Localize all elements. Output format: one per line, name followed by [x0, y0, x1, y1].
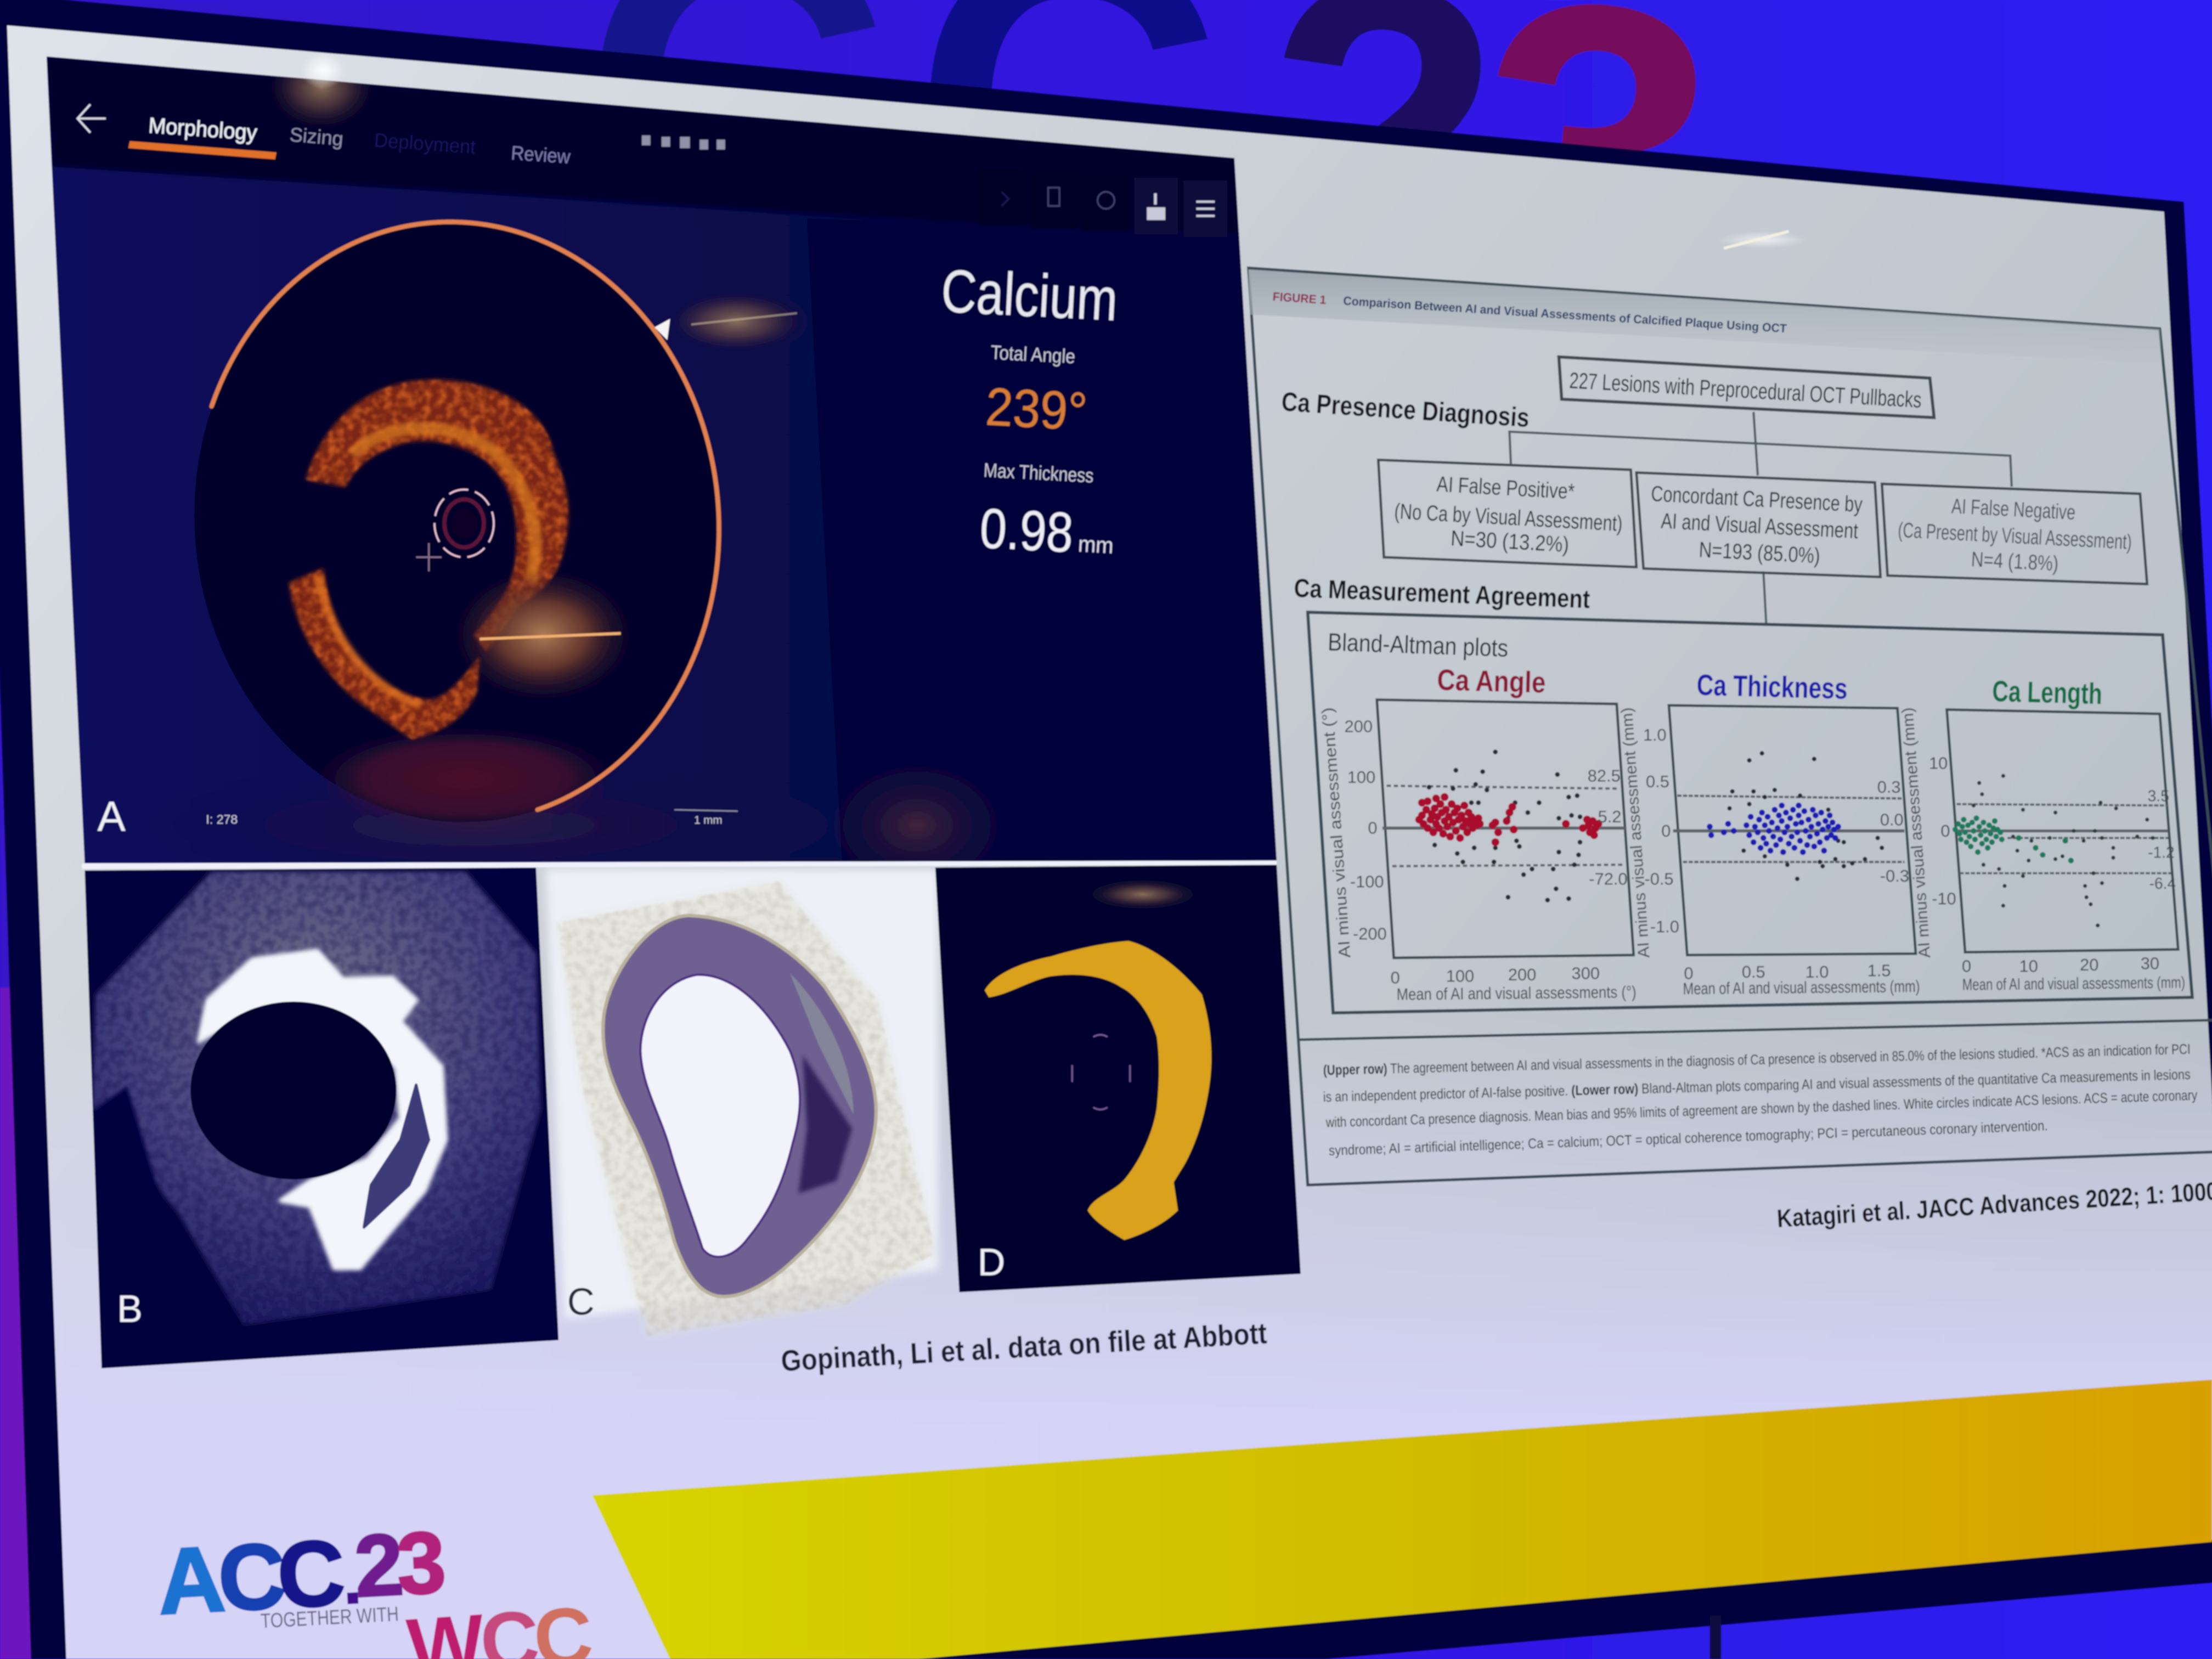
- flow box: AI false positive: [1378, 460, 1637, 567]
- axis tick labels: -1.0: [1650, 917, 1679, 936]
- vessel wall: [603, 916, 876, 1296]
- label: Total Angle: Total Angle: [990, 341, 1076, 368]
- flow box: AI false negative: N=4 (1.8%): [1971, 548, 2059, 575]
- flow box: concordant: AI and Visual Assessment: [1660, 509, 1859, 543]
- axis tick labels: [1929, 753, 2159, 976]
- limits labels: 3.5: [2148, 787, 2169, 805]
- lumen: [190, 1002, 397, 1180]
- catheter marks: [1072, 1035, 1130, 1109]
- data points: all lesions: [1429, 752, 1580, 900]
- limits labels: -1.2: [2148, 843, 2175, 861]
- axis tick labels: 0.5: [1646, 772, 1669, 791]
- letter C: C: [567, 1280, 595, 1323]
- flow box: AI false negative: [1882, 484, 2147, 584]
- value: 239 degrees: 239°: [984, 376, 1088, 442]
- tab: Sizing: Sizing: [289, 123, 344, 150]
- y-axis title: AI minus visual assessment (mm): [1898, 707, 1934, 958]
- yellow segmentation: [985, 941, 1211, 1240]
- axis tick labels: [1345, 717, 1600, 987]
- axis tick labels: [1643, 725, 1891, 983]
- x-axis title: Mean of AI and visual assessments (mm): [1683, 977, 1920, 998]
- logo: ACC.23 with WCC: C: [275, 1520, 347, 1627]
- logo tagline: TOGETHER WITH: [260, 1602, 399, 1632]
- glare: ceiling light: [272, 77, 373, 126]
- figure frame: [1249, 268, 2212, 1185]
- axis tick labels: 0: [1661, 821, 1671, 840]
- figure caption: syndrome; AI = artificial intelligence; Ca = calcium; OCT = optical coherence tomography; PCI = percutaneous coronary intervention.: [1329, 1118, 2048, 1159]
- axis tick labels: 0: [1962, 957, 1971, 976]
- axis tick labels: 10: [2019, 957, 2038, 976]
- tab: Deployment: Deployment: [374, 129, 476, 158]
- heading: Ca Measurement Agreement: Ca Measurement Agreement: [1294, 574, 1590, 614]
- data points: outliers: [1730, 753, 1882, 879]
- flow connectors: [1509, 412, 2012, 624]
- monitor stand: [1710, 1615, 1721, 1659]
- axis tick labels: 0: [1368, 819, 1378, 838]
- axis tick labels: 0: [1684, 964, 1694, 983]
- logo: ACC.23 with WCC: A: [155, 1526, 228, 1634]
- dark patch inside calcium: [364, 1085, 429, 1227]
- axis tick labels: 200: [1508, 965, 1536, 984]
- logo: ACC.23 with WCC: C: [216, 1523, 288, 1630]
- right toolbar icons: [979, 170, 1227, 237]
- heading: Bland-Altman plots: Bland-Altman plots: [1327, 628, 1509, 662]
- flow box: AI false positive: (No Ca by Visual Assessment): [1393, 499, 1623, 536]
- yellow banner: [592, 1380, 2212, 1659]
- axis tick labels: 30: [2141, 954, 2159, 973]
- OCT image disc: [170, 200, 744, 844]
- small toolbar icons: [642, 136, 725, 150]
- axis tick labels: 100: [1446, 967, 1474, 986]
- data points: green cluster: [1955, 818, 2071, 861]
- scale bar: 1 mm: [694, 814, 723, 827]
- axis tick labels: 1.5: [1867, 961, 1891, 980]
- value: 0.98 mm: 0.98: [978, 496, 1075, 565]
- letter A: A: [97, 793, 126, 840]
- glint: ceiling light on slide edge: [301, 52, 346, 89]
- axis tick labels: 100: [1347, 768, 1375, 787]
- reference lines: [1954, 804, 2171, 873]
- limits labels: [2148, 787, 2176, 892]
- chart: Ca Length: [1898, 675, 2185, 994]
- toolbar strip: [47, 57, 1239, 240]
- glint: top right of slide: [1718, 232, 1809, 249]
- axis tick labels: 10: [1929, 753, 1948, 772]
- lumen: [640, 975, 800, 1257]
- axis tick labels: -200: [1353, 924, 1387, 944]
- calcium crescent lower: [289, 568, 479, 739]
- axis tick labels: -0.5: [1644, 869, 1674, 888]
- tab: Review: Review: [510, 142, 572, 168]
- flow box: 227 lesions: [1559, 357, 1934, 417]
- logo: ACC.23 with WCC: 3: [394, 1513, 448, 1613]
- limits labels: 0.3: [1877, 777, 1901, 797]
- data points: outliers: [1973, 776, 2153, 926]
- dark plaque: [798, 1055, 852, 1193]
- axis tick labels: 1.0: [1805, 962, 1829, 981]
- cursor cross: [416, 543, 442, 571]
- x-axis title: Mean of AI and visual assessments (°): [1396, 982, 1637, 1004]
- letter B: B: [117, 1287, 143, 1330]
- y-axis title: AI minus visual assessment (mm): [1618, 707, 1654, 958]
- flow box: 227 lesions: 227 Lesions with Preprocedural OCT Pullbacks: [1568, 368, 1922, 413]
- plot frame: [1669, 706, 1916, 955]
- tab: Morphology: [128, 114, 276, 160]
- axis tick labels: 1.0: [1643, 725, 1667, 744]
- glare over disc: [456, 570, 630, 699]
- figure header band: [1249, 269, 2163, 364]
- tab: Morphology: Morphology: [148, 114, 258, 145]
- reference lines: [1383, 786, 1625, 866]
- logo WCC: [404, 1589, 596, 1659]
- heading: Ca Presence Diagnosis: Ca Presence Diagnosis: [1280, 387, 1530, 433]
- figure title: FIGURE 1: [1272, 290, 1327, 307]
- panel A: OCT software screen: [47, 45, 1277, 889]
- panel C: histology: [546, 869, 938, 1336]
- letter D: D: [978, 1241, 1005, 1284]
- CT tissue: [92, 872, 540, 1325]
- logo: ACC.23 with WCC: 2: [352, 1515, 406, 1615]
- figure panel: Ca diagnosis and agreement: [1249, 268, 2212, 1185]
- citation: Gopinath: Gopinath, Li et al. data on file at Abbott: [780, 1317, 1268, 1378]
- axis tick labels: 200: [1345, 717, 1373, 736]
- heading: Calcium: Calcium: [940, 257, 1119, 334]
- label: Max Thickness: Max Thickness: [983, 459, 1094, 487]
- figure caption: [1323, 1042, 2198, 1159]
- limits labels: 0.0: [1880, 810, 1904, 829]
- lower reflections: [113, 762, 1002, 889]
- Bland-Altman box: [1308, 612, 2192, 1013]
- y-axis title: AI minus visual assessment (°): [1319, 707, 1354, 958]
- limits labels: -72.0: [1589, 869, 1628, 888]
- axis tick labels: 0.5: [1742, 962, 1765, 981]
- orange measurement arc: [212, 222, 719, 810]
- data points: blue cluster: [1710, 805, 1838, 852]
- reference lines: [1673, 795, 1904, 862]
- panel B: CT image: [84, 867, 558, 1368]
- adventitia: [557, 882, 935, 1336]
- glare: [1092, 881, 1193, 909]
- reflection at disc bottom: [318, 728, 614, 830]
- plot frame: [1377, 699, 1634, 958]
- flow box: concordant: Concordant Ca Presence by: [1650, 482, 1863, 517]
- axis tick labels: 0: [1391, 968, 1400, 987]
- limits labels: -6.4: [2149, 874, 2176, 892]
- chart title: Ca Thickness: [1696, 669, 1848, 706]
- limits labels: 82.5: [1588, 766, 1621, 786]
- data points: red cluster: [1419, 797, 1598, 842]
- limits labels: 5.2: [1598, 807, 1621, 826]
- calcium crescent upper: [306, 380, 568, 652]
- logo: ACC.23 with WCC: .: [339, 1535, 365, 1621]
- flow box: AI false positive: N=30 (13.2%): [1450, 526, 1570, 557]
- limits labels: [1877, 777, 1909, 885]
- divider under panel A: [82, 861, 1277, 869]
- white arrow marker: [654, 319, 670, 340]
- logo: ACC.23 with WCC: [155, 1513, 596, 1659]
- axis tick labels: 0: [1940, 821, 1950, 840]
- plot frame: [1947, 709, 2178, 952]
- flow box: concordant: [1637, 472, 1881, 577]
- value: 0.98 mm: mm: [1077, 531, 1114, 558]
- axis tick labels: 300: [1572, 964, 1600, 983]
- flow box: AI false negative: AI False Negative: [1951, 494, 2076, 524]
- calcium white: [199, 951, 446, 1268]
- axis tick labels: -10: [1932, 889, 1956, 908]
- catheter rings: [435, 489, 494, 557]
- limits labels: [1588, 766, 1628, 888]
- divider above caption: [1298, 1020, 2212, 1040]
- back arrow icon: [77, 104, 106, 133]
- limits labels: -0.3: [1880, 866, 1909, 885]
- panel D: segmented calcium: [935, 865, 1301, 1292]
- chart: Ca Angle: [1319, 663, 1637, 1004]
- frame number: I: 278: [206, 812, 238, 827]
- scale bar: [674, 810, 738, 827]
- axis tick labels: -100: [1350, 872, 1384, 891]
- figure title: Comparison Between AI and Visual Assessments of Calcified Plaque Using OCT: [1343, 294, 1787, 335]
- chart: Ca Thickness: [1618, 669, 1920, 998]
- glare: mid reflection: [666, 291, 807, 353]
- results pane: [807, 219, 1277, 864]
- axis tick labels: 20: [2080, 955, 2098, 974]
- flow box: AI false positive: AI False Positive*: [1436, 472, 1575, 504]
- chart title: Ca Angle: [1437, 663, 1546, 699]
- chart title: Ca Length: [1992, 675, 2103, 710]
- flow box: concordant: N=193 (85.0%): [1699, 538, 1821, 568]
